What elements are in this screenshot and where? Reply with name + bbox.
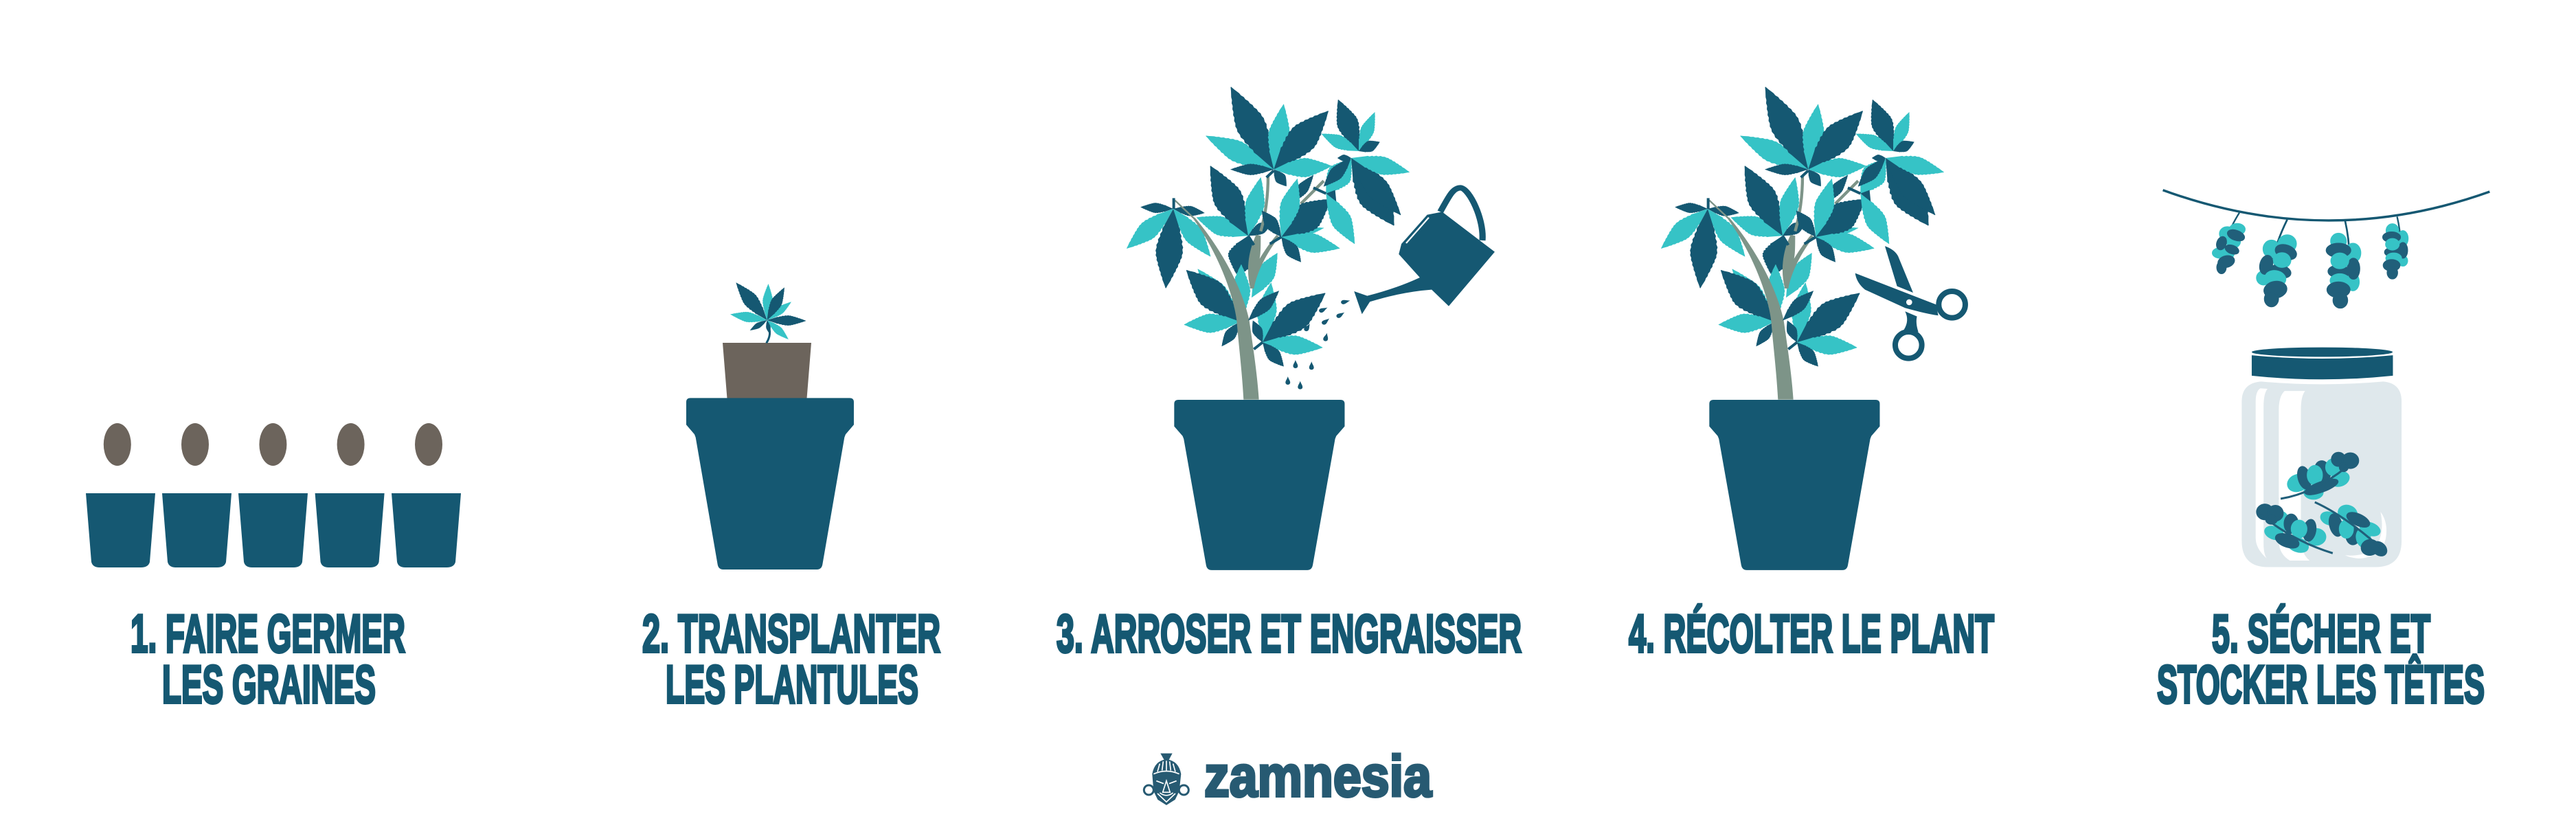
scissors xyxy=(1855,246,1965,359)
brown nursery pot xyxy=(723,343,811,398)
hanging bud 2 xyxy=(2257,220,2298,306)
leaf: left centre xyxy=(1728,159,1809,280)
step 3: water and fertilise xyxy=(1057,80,1522,664)
leaf stubs xyxy=(1708,170,1860,245)
leaf: upper right xyxy=(1853,95,1917,157)
handle xyxy=(1440,188,1482,240)
step 2: transplant seedlings xyxy=(642,278,940,714)
step 1: germinate seeds xyxy=(86,423,461,714)
pot xyxy=(1709,400,1879,570)
logo mask icon xyxy=(1144,754,1188,805)
stems xyxy=(1709,177,1858,400)
logo xyxy=(1144,744,1432,809)
watering can and drops xyxy=(1285,188,1495,390)
leaf: top xyxy=(1735,80,1873,190)
hanging bud 1 xyxy=(2213,213,2246,273)
jar lid xyxy=(2252,348,2393,379)
drops xyxy=(1285,299,1351,390)
leaf: lower left front blade xyxy=(1778,286,1818,326)
label step 1 xyxy=(131,603,405,714)
jar body xyxy=(2241,381,2402,567)
hanging bud 3 xyxy=(2327,221,2360,308)
rope xyxy=(2163,190,2489,221)
leaf: lower right xyxy=(1783,282,1869,371)
plant xyxy=(1655,80,1946,400)
label step 2 xyxy=(642,603,940,714)
leaf: right front blades xyxy=(1853,149,1946,191)
jar bud lower left xyxy=(2257,504,2333,554)
label step 2: 2. TRANSPLANTER xyxy=(642,603,940,664)
leaf: far left xyxy=(1655,201,1752,289)
leaf: back blades xyxy=(1778,172,1852,302)
pot xyxy=(1174,400,1344,570)
label step 1: 1. FAIRE GERMER xyxy=(131,603,405,664)
label step 3: 3. ARROSER ET ENGRAISSER xyxy=(1057,603,1522,664)
large pot xyxy=(686,398,854,570)
seedling xyxy=(730,278,806,343)
label step 4: 4. RÉCOLTER LE PLANT xyxy=(1629,603,1994,664)
label step 1: LES GRAINES xyxy=(162,654,376,714)
seeds xyxy=(104,423,442,466)
leaf: front centre xyxy=(1791,176,1876,267)
jar bud upper xyxy=(2281,453,2358,499)
step 5: dry and store xyxy=(2157,190,2489,714)
jar bud lower right xyxy=(2315,502,2389,559)
leaf: right dark blades xyxy=(1871,149,1944,235)
leaf: lower left xyxy=(1710,260,1785,350)
small pots xyxy=(86,493,461,567)
logo wordmark: zamnesia xyxy=(1204,744,1432,809)
leaf: right centre teal xyxy=(1851,152,1898,249)
jar highlights xyxy=(2256,388,2386,561)
step 4: harvest xyxy=(1629,80,1994,664)
hanging bud 4 xyxy=(2383,216,2408,278)
label step 2: LES PLANTULES xyxy=(666,654,918,714)
label step 5 xyxy=(2157,603,2485,714)
label step 5: 5. SÉCHER ET xyxy=(2212,603,2430,664)
jar xyxy=(2241,348,2402,567)
can body and spout xyxy=(1354,212,1495,314)
plant copy xyxy=(1120,80,1412,400)
